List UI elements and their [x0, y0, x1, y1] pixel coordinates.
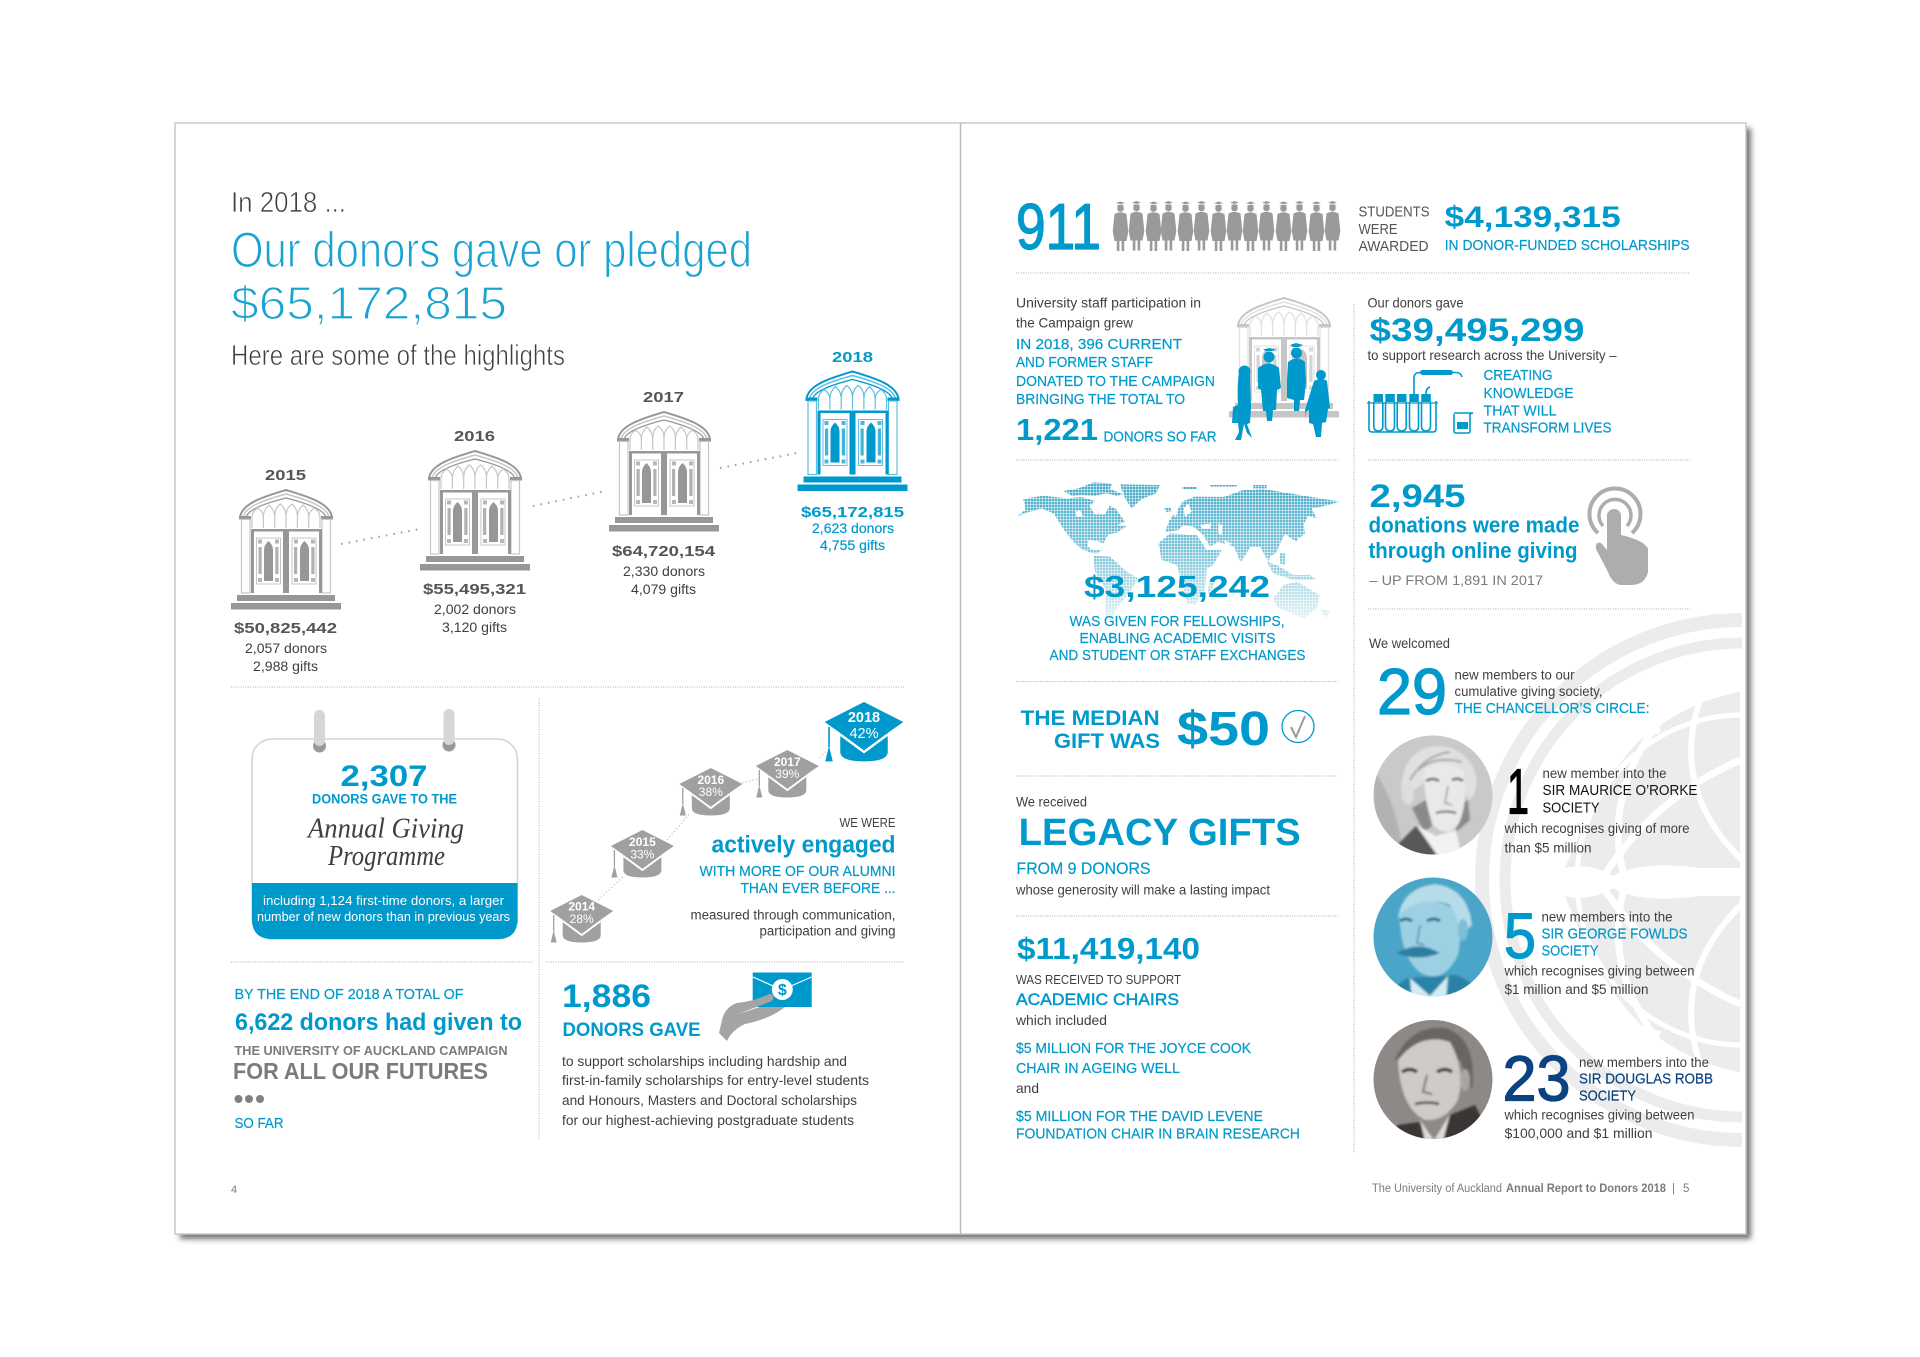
- text block: Fowlds society: which recognises giving between: [1504, 963, 1694, 979]
- footer: report title and page number: [1372, 1183, 1689, 1195]
- year column: 2015: 2,057 donors: [245, 640, 327, 656]
- text block: median gift: GIFT WAS: [1054, 730, 1160, 753]
- portrait: Sir George Fowlds: [1374, 878, 1492, 996]
- icon: hand holding dollar envelope: $: [778, 982, 787, 999]
- text block: staff participation: DONORS SO FAR: [1104, 430, 1216, 446]
- icon: row of graduating students: [1113, 201, 1340, 251]
- text block: we welcomed: We welcomed: [1369, 635, 1450, 651]
- text block: O'Rorke society: [1504, 756, 1698, 856]
- text block: students were awarded: AWARDED: [1358, 239, 1428, 255]
- text block: Robb society: $100,000 and $1 million: [1504, 1125, 1652, 1141]
- year column: 2016: 3,120 gifts: [442, 619, 507, 635]
- text block: staff participation: the Campaign grew: [1016, 314, 1134, 330]
- year column: 2015: [231, 467, 341, 674]
- year column: 2017: $64,720,154: [612, 543, 716, 560]
- text block: O'Rorke society: new member into the: [1542, 766, 1666, 781]
- text block: Fowlds society: $1 million and $5 million: [1504, 981, 1648, 997]
- panel: annual giving calendar: [252, 709, 518, 939]
- year column: 2017: [609, 389, 719, 597]
- text block: 6,622 donors: FOR ALL OUR FUTURES: [233, 1058, 488, 1084]
- year column: 2018: [798, 349, 908, 553]
- text block: 1,886 donors gave: 1,886: [562, 978, 651, 1014]
- text block: Fowlds society: new members into the: [1542, 910, 1672, 924]
- stat: 29 chancellors circle: 29: [1377, 655, 1447, 728]
- portrait: Sir Maurice O'Rorke: [1374, 736, 1492, 854]
- text block: actively engaged: actively engaged: [712, 832, 896, 858]
- text block: fellowships: WAS GIVEN FOR FELLOWSHIPS,: [1070, 614, 1284, 630]
- page spread: [175, 123, 1746, 1234]
- text block: Fowlds society: SOCIETY: [1542, 944, 1599, 960]
- text block: median gift: $50: [1177, 703, 1270, 756]
- icon: test tubes and beaker: [1367, 370, 1473, 433]
- text block: 1,886 donors gave: DONORS GAVE: [562, 1020, 700, 1041]
- text block: online giving: [1368, 478, 1580, 588]
- text block: 1,886 donors gave: first-in-family scholarships for entry-level students: [562, 1072, 869, 1088]
- text block: online giving: – UP FROM 1,891 IN 2017: [1370, 572, 1543, 588]
- subheading: highlights: Here are some of the highlights: [231, 340, 565, 372]
- chart: graduation caps engagement by year: 38%: [699, 785, 723, 799]
- text block: Fowlds society: 5: [1504, 900, 1536, 972]
- heading: our donors gave or pledged: Our donors gave or pledged: [231, 222, 752, 278]
- stat: scholarships amount: $4,139,315: [1445, 201, 1621, 234]
- text block: students were awarded: [1358, 204, 1430, 255]
- year column: 2016: 2016: [454, 428, 495, 445]
- text block: Robb society: new members into the: [1579, 1055, 1709, 1070]
- text block: Robb society: SIR DOUGLAS ROBB: [1579, 1072, 1713, 1088]
- page number: 4: 4: [231, 1184, 237, 1196]
- text block: actively engaged: WE WERE: [840, 815, 896, 830]
- text block: online giving: 2,945: [1370, 478, 1466, 514]
- chart: graduation caps engagement by year: 28%: [570, 912, 594, 926]
- connector: 2016 to 2017: [533, 491, 606, 506]
- text block: 6,622 donors: THE UNIVERSITY OF AUCKLAND CAMPAIGN: [234, 1043, 508, 1058]
- text block: academic chairs: ACADEMIC CHAIRS: [1016, 990, 1179, 1009]
- chart: graduation caps engagement by year: 33%: [630, 848, 655, 862]
- text block: research funding: CREATING: [1484, 368, 1552, 384]
- panel: annual giving calendar: including 1,124 first-time donors, a larger: [263, 893, 505, 908]
- text block: research funding: [1368, 294, 1617, 437]
- text block: 6,622 donors: SO FAR: [234, 1116, 284, 1132]
- heading: In 2018: In 2018 ...: [231, 187, 346, 219]
- text block: academic chairs: $5 MILLION FOR THE DAVID LEVENE: [1016, 1109, 1263, 1125]
- text block: staff participation: DONATED TO THE CAMPAIGN: [1016, 374, 1215, 390]
- text block: actively engaged: WITH MORE OF OUR ALUMNI: [700, 864, 896, 880]
- portrait: Sir Douglas Robb: [1374, 1020, 1492, 1139]
- text block: O'Rorke society: SIR MAURICE O’RORKE: [1542, 783, 1698, 799]
- text block: Robb society: SOCIETY: [1579, 1089, 1636, 1105]
- stat: 29 chancellors circle: THE CHANCELLOR’S CIRCLE:: [1454, 701, 1650, 717]
- chart: graduation caps engagement by year: 2014: [568, 900, 595, 914]
- text block: 1,886 donors gave: and Honours, Masters and Doctoral scholarships: [562, 1092, 857, 1108]
- text block: Robb society: 23: [1502, 1043, 1570, 1115]
- year column: 2017: 2,330 donors: [623, 563, 705, 579]
- text block: legacy gifts: FROM 9 DONORS: [1016, 859, 1150, 878]
- panel: annual giving calendar: Annual Giving: [306, 814, 464, 844]
- connector: 2017 to 2018: [720, 453, 797, 468]
- chart: graduation caps engagement by year: 42%: [849, 726, 879, 742]
- footer: report title and page number: The University of Auckland: [1372, 1183, 1502, 1195]
- text block: 6,622 donors: BY THE END OF 2018 A TOTAL OF: [234, 987, 464, 1003]
- text block: Fowlds society: SIR GEORGE FOWLDS: [1542, 926, 1688, 942]
- text block: research funding: KNOWLEDGE: [1484, 386, 1574, 402]
- text block: online giving: donations were made: [1368, 512, 1580, 538]
- stat: 29 chancellors circle: [1377, 655, 1650, 728]
- text block: staff participation: IN 2018, 396 CURRENT: [1016, 337, 1182, 353]
- footer: report title and page number: Annual Report to Donors 2018: [1506, 1183, 1667, 1195]
- text block: academic chairs: FOUNDATION CHAIR IN BRAIN RESEARCH: [1016, 1126, 1300, 1142]
- text block: online giving: through online giving: [1368, 538, 1578, 563]
- text block: legacy gifts: LEGACY GIFTS: [1019, 812, 1301, 854]
- text block: fellowships: ENABLING ACADEMIC VISITS: [1080, 631, 1276, 647]
- text block: research funding: THAT WILL: [1484, 404, 1556, 420]
- heading: total amount: $65,172,815: [231, 277, 507, 329]
- stat: 29 chancellors circle: cumulative giving society,: [1454, 684, 1602, 699]
- year column: 2017: 2017: [643, 389, 684, 406]
- text block: research funding: Our donors gave: [1368, 294, 1464, 310]
- text block: Robb society: [1502, 1043, 1713, 1141]
- text block: research funding: to support research across the University –: [1368, 347, 1617, 363]
- text block: staff participation: AND FORMER STAFF: [1016, 355, 1153, 371]
- stat: scholarships amount: IN DONOR-FUNDED SCHOLARSHIPS: [1445, 238, 1690, 254]
- text block: research funding: TRANSFORM LIVES: [1484, 421, 1612, 437]
- text block: fellowships: $3,125,242: [1084, 569, 1270, 604]
- text block: O'Rorke society: SOCIETY: [1542, 800, 1600, 816]
- text block: academic chairs: WAS RECEIVED TO SUPPORT: [1016, 972, 1181, 987]
- year column: 2018: 2,623 donors: [812, 520, 894, 536]
- text block: 1,886 donors gave: [562, 978, 869, 1128]
- footer: report title and page number: 5: [1683, 1183, 1689, 1195]
- stat: 29 chancellors circle: new members to our: [1454, 668, 1575, 682]
- text block: academic chairs: CHAIR IN AGEING WELL: [1016, 1061, 1180, 1077]
- text block: 1,886 donors gave: to support scholarships including hardship and: [562, 1053, 847, 1069]
- connector: 2015 to 2016: [341, 529, 420, 544]
- stat: scholarships amount: [1445, 201, 1690, 254]
- text block: Robb society: which recognises giving between: [1504, 1106, 1694, 1122]
- year column: 2016: 2,002 donors: [434, 601, 516, 617]
- year column: 2018: $65,172,815: [801, 504, 904, 521]
- text block: actively engaged: [690, 815, 896, 938]
- year column: 2018: 4,755 gifts: [820, 537, 885, 553]
- year column: 2015: $50,825,442: [234, 620, 337, 637]
- text block: staff participation: BRINGING THE TOTAL TO: [1016, 392, 1185, 408]
- text block: academic chairs: $5 MILLION FOR THE JOYCE COOK: [1016, 1041, 1251, 1057]
- year column: 2016: [420, 428, 530, 635]
- chart: graduation caps engagement by year: 39%: [775, 767, 800, 781]
- text block: staff participation: 1,221: [1016, 412, 1098, 447]
- year column: 2018: 2018: [832, 349, 873, 366]
- text block: staff participation: [1016, 294, 1216, 447]
- watermark: university crest knot: [1475, 613, 1742, 1147]
- chart: graduation caps engagement by year: 2018: [848, 710, 880, 726]
- text block: actively engaged: participation and giving: [760, 924, 896, 938]
- text block: 6,622 donors: [233, 987, 522, 1132]
- map: world map dotted: [1017, 482, 1340, 622]
- chart: graduation caps engagement by year: 2016: [697, 773, 724, 787]
- text block: legacy gifts: whose generosity will make a lasting impact: [1015, 882, 1270, 898]
- text block: research funding: $39,495,299: [1370, 312, 1584, 348]
- text block: actively engaged: measured through communication,: [690, 908, 896, 922]
- footer: report title and page number: |: [1672, 1183, 1675, 1195]
- chart: graduation caps engagement by year: [550, 702, 903, 942]
- text block: 1,886 donors gave: for our highest-achieving postgraduate students: [562, 1112, 854, 1128]
- text block: 6,622 donors: 6,622 donors had given to: [235, 1009, 522, 1036]
- text block: Fowlds society: [1504, 900, 1694, 997]
- text block: academic chairs: which included: [1015, 1012, 1107, 1028]
- panel: annual giving calendar: DONORS GAVE TO THE: [312, 792, 457, 806]
- stat: 911: 911: [1016, 190, 1101, 263]
- icon: pointing hand touch: [1590, 488, 1648, 585]
- text block: median gift: THE MEDIAN: [1021, 707, 1160, 730]
- chart: graduation caps engagement by year: 2017: [774, 755, 801, 769]
- text block: legacy gifts: We received: [1016, 794, 1087, 810]
- text block: O'Rorke society: which recognises giving of more: [1504, 820, 1690, 836]
- panel: annual giving calendar: 2,307: [340, 760, 428, 793]
- icon: hand holding dollar envelope: [719, 972, 812, 1041]
- text block: O'Rorke society: than $5 million: [1504, 840, 1592, 856]
- text block: academic chairs: $11,419,140: [1017, 931, 1200, 966]
- year column: 2016: $55,495,321: [423, 581, 526, 598]
- text block: median gift: [1021, 703, 1270, 756]
- year column: 2015: 2015: [265, 467, 306, 484]
- panel: annual giving calendar: Programme: [327, 841, 445, 872]
- text block: students were awarded: STUDENTS: [1358, 204, 1430, 220]
- year column: 2017: 4,079 gifts: [631, 581, 696, 597]
- panel: annual giving calendar: number of new donors than in previous years: [257, 909, 510, 924]
- text block: fellowships: [1050, 569, 1306, 664]
- text block: legacy gifts: [1015, 794, 1301, 898]
- icon: building with staff silhouettes: [1229, 298, 1339, 440]
- text block: O'Rorke society: 1: [1507, 756, 1529, 828]
- text block: staff participation: University staff participation in: [1016, 294, 1201, 310]
- year column: 2015: 2,988 gifts: [253, 658, 318, 674]
- icon: check mark in circle: [1282, 710, 1314, 742]
- text block: actively engaged: THAN EVER BEFORE ...: [740, 881, 896, 897]
- text block: fellowships: AND STUDENT OR STAFF EXCHANGES: [1050, 648, 1306, 664]
- text block: academic chairs: [1015, 931, 1300, 1142]
- text block: academic chairs: and: [1016, 1080, 1039, 1096]
- text block: students were awarded: WERE: [1358, 222, 1398, 238]
- chart: graduation caps engagement by year: 2015: [629, 835, 656, 849]
